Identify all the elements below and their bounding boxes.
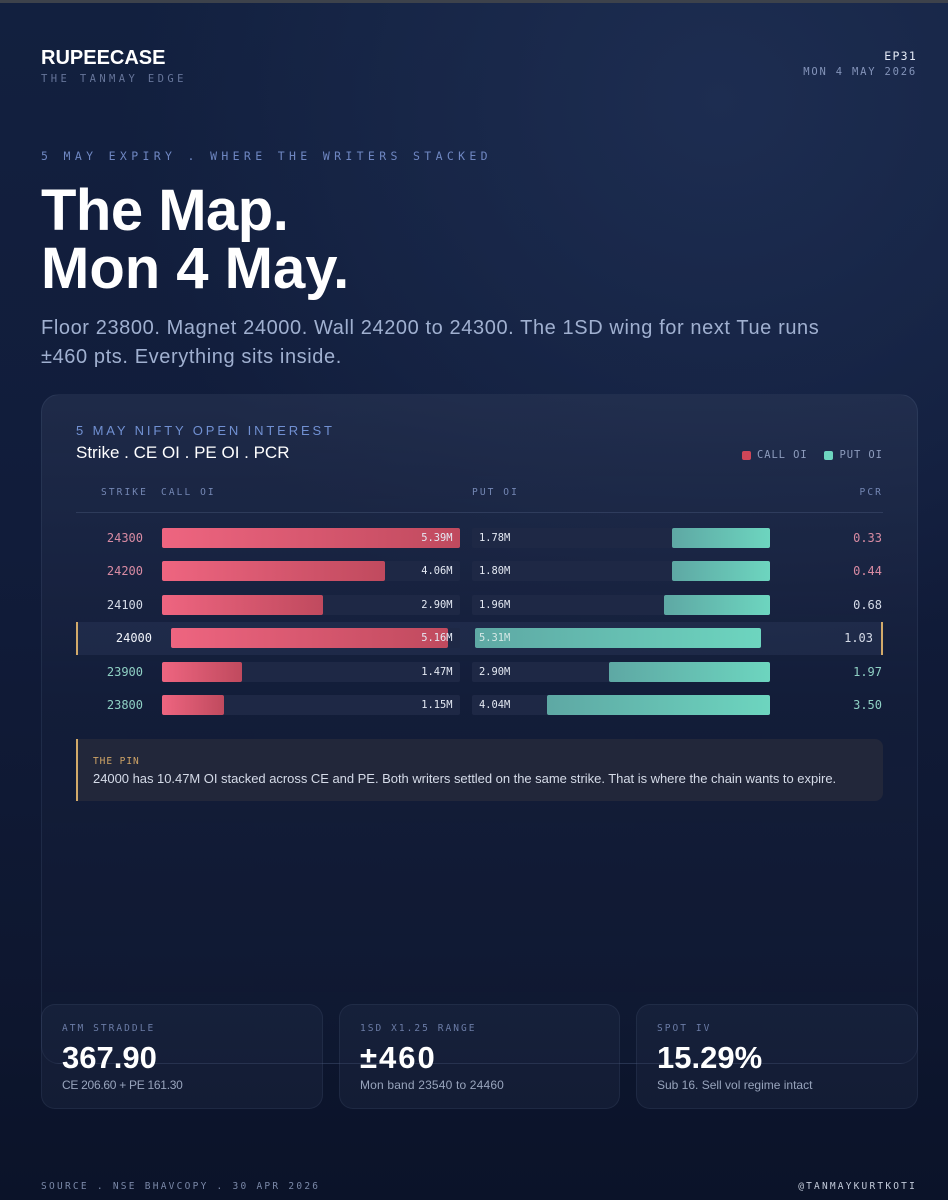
row 24300: 24300 [107, 530, 143, 544]
row 23800: 3.50 [853, 698, 882, 712]
stat card: range: Mon band 23540 to 24460 [360, 1078, 504, 1092]
stat card: range: 1SD X1.25 RANGE [360, 1023, 477, 1034]
legend: call swatch [742, 450, 751, 460]
brand name: RUPEECASE [41, 47, 165, 69]
title [41, 178, 349, 301]
table header [76, 486, 883, 513]
row 24000: 24000 [116, 631, 152, 645]
stat card: range [339, 1004, 620, 1109]
row 24100 [107, 595, 882, 615]
row 24200: 4.06M [421, 565, 452, 577]
row 24200 [107, 561, 882, 581]
title: Mon 4 May. [41, 236, 349, 301]
subtitle: ±460 pts. Everything sits inside. [41, 346, 342, 368]
row 24100: 24100 [107, 598, 143, 612]
row 24300: 5.39M [421, 532, 452, 544]
row 23900: 2.90M [479, 666, 510, 678]
episode block [803, 49, 917, 78]
row 24300: 1.78M [479, 532, 510, 544]
row 24200: 24200 [107, 564, 143, 578]
row 24000 [116, 628, 873, 648]
row 24100: 0.68 [853, 598, 882, 612]
legend: call label: CALL OI [757, 449, 808, 461]
stat card: ATM straddle: CE 206.60 + PE 161.30 [62, 1078, 183, 1092]
stat card: spot IV: Sub 16. Sell vol regime intact [657, 1078, 812, 1092]
legend: put label: PUT OI [840, 449, 883, 461]
callout text: 24000 has 10.47M OI stacked across CE and PE. Both writers settled on the same strike. That is where the chain wants to expire. [93, 771, 836, 786]
row 23900 [107, 662, 882, 682]
callout label: THE PIN [93, 756, 140, 767]
panel: open interest chart [41, 394, 918, 1064]
panel eyebrow: 5 MAY NIFTY OPEN INTEREST [76, 423, 335, 438]
row 23900: 23900 [107, 664, 143, 678]
header strike: STRIKE [101, 487, 148, 498]
row 24100: 2.90M [421, 598, 452, 610]
row 24200: 1.80M [479, 565, 510, 577]
date: MON 4 MAY 2026 [803, 66, 917, 78]
stat card: range: ±460 [360, 1040, 437, 1075]
row 23900: 1.97 [853, 664, 882, 678]
row 23800: 4.04M [479, 699, 510, 711]
header pcr: PCR [860, 487, 883, 498]
stat card: ATM straddle: ATM STRADDLE [62, 1023, 155, 1034]
title: The Map. [41, 178, 288, 243]
row 24200: 0.44 [853, 564, 882, 578]
legend [742, 449, 883, 461]
footer handle: @TANMAYKURTKOTI [798, 1181, 917, 1192]
stat card: spot IV: 15.29% [657, 1040, 762, 1075]
footer source: SOURCE . NSE BHAVCOPY . 30 APR 2026 [41, 1181, 320, 1192]
row 23800: 1.15M [421, 699, 452, 711]
stat card: ATM straddle: 367.90 [62, 1040, 157, 1075]
row 24300: 0.33 [853, 530, 882, 544]
legend: put swatch [824, 450, 833, 460]
subtitle: Floor 23800. Magnet 24000. Wall 24200 to 24300. The 1SD wing for next Tue runs [41, 317, 819, 339]
brand block [41, 47, 187, 85]
eyebrow: 5 MAY EXPIRY . WHERE THE WRITERS STACKED [41, 149, 492, 163]
row 23900: 1.47M [421, 666, 452, 678]
callout: the pin [76, 739, 883, 801]
brand tagline: THE TANMAY EDGE [41, 73, 187, 85]
stat card: ATM straddle [41, 1004, 323, 1109]
row 23800 [107, 695, 882, 715]
header put: PUT OI [472, 487, 519, 498]
highlight band: 24000 [76, 622, 883, 655]
row 24100: 1.96M [479, 598, 510, 610]
row 24000: 5.16M [421, 632, 452, 644]
subtitle [41, 317, 819, 368]
header call: CALL OI [161, 487, 216, 498]
stat card: spot IV [636, 1004, 918, 1109]
panel title: Strike . CE OI . PE OI . PCR [76, 443, 290, 462]
episode number: EP31 [884, 49, 917, 63]
panel heading [76, 423, 335, 462]
stat card: spot IV: SPOT IV [657, 1023, 711, 1034]
row 24000: 1.03 [844, 631, 873, 645]
row 23800: 23800 [107, 698, 143, 712]
row 24000: 5.31M [479, 632, 510, 644]
row 24300 [107, 528, 882, 548]
